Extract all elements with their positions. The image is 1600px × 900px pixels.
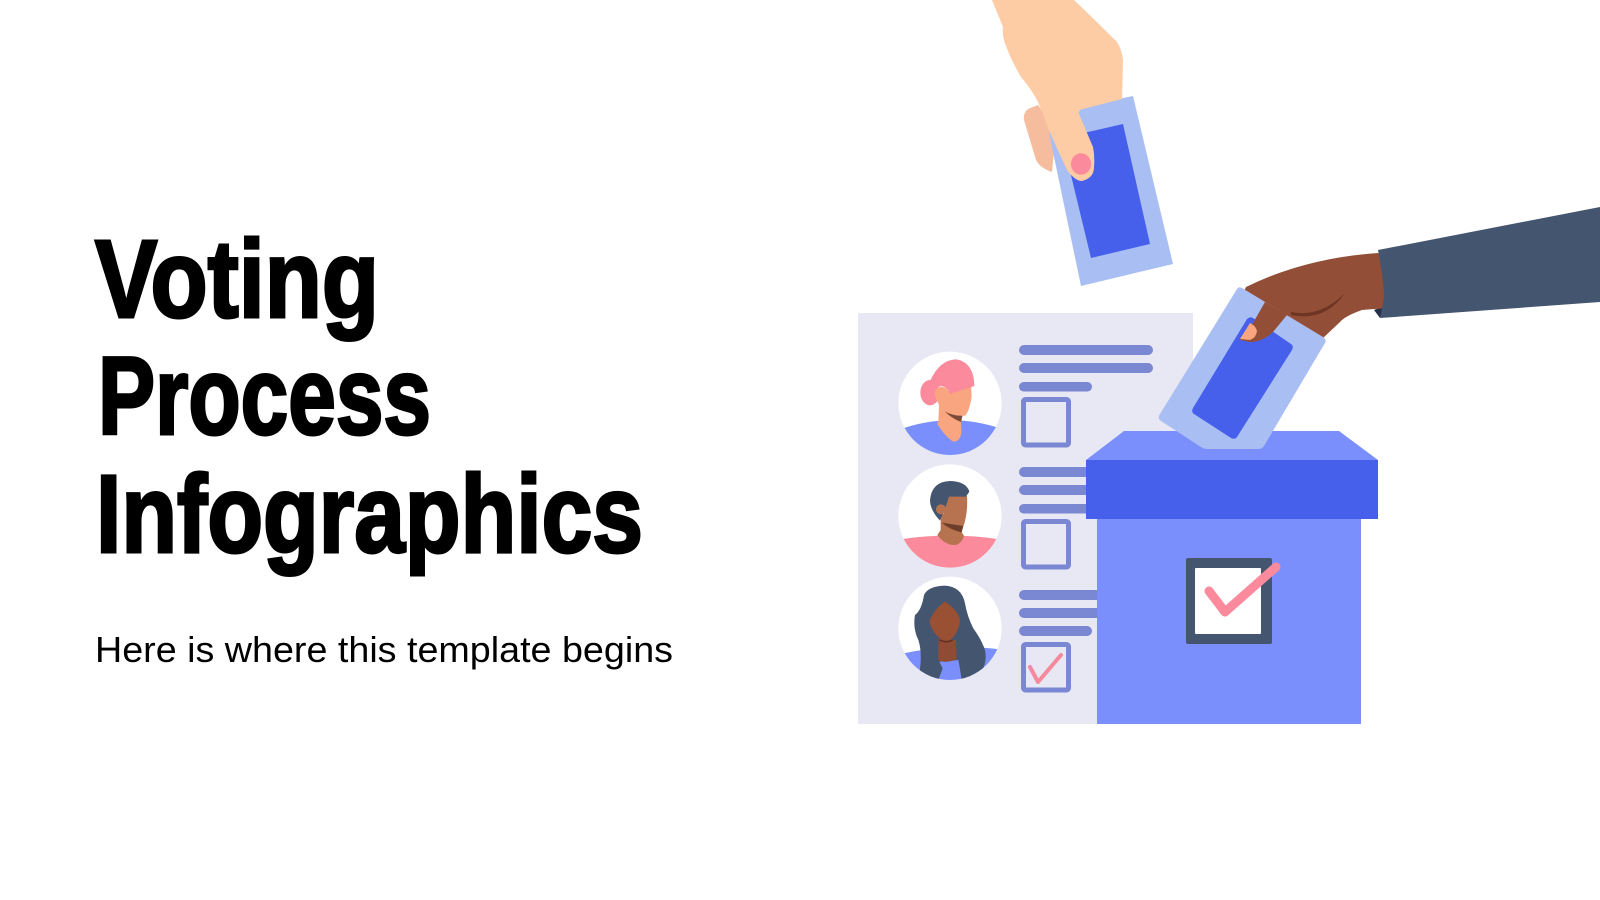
index finger [1240, 302, 1287, 342]
subtitle: Here is where this template begins [95, 629, 673, 670]
illustration: ballot box [1086, 431, 1378, 724]
row 2 text lines [1019, 467, 1153, 514]
hand [1240, 253, 1392, 338]
portrait: man with dark hair [898, 464, 1002, 570]
illustration: light-skinned hand holding ballot [992, 0, 1173, 286]
illustration: dark-skinned arm inserting ballot [1159, 207, 1600, 449]
jacket sleeve [1378, 207, 1600, 318]
illustration: ballot paper with candidates [858, 313, 1193, 724]
row 1 text lines [1019, 345, 1153, 392]
thumb nail [1240, 323, 1257, 340]
sleeve cuff [1374, 306, 1384, 318]
lid top [1086, 431, 1378, 460]
candidate rows [1019, 345, 1153, 690]
row 3 checked checkbox [1024, 644, 1068, 690]
portrait: woman with pink hair [898, 352, 1002, 460]
back finger [1024, 105, 1056, 172]
ballot card inner [1192, 317, 1293, 439]
row 2 empty checkbox [1024, 522, 1068, 567]
hand [992, 0, 1123, 181]
box body [1097, 519, 1361, 724]
row 3 text lines [1019, 590, 1153, 636]
candidate portraits [898, 352, 1002, 683]
ballot card [1159, 287, 1326, 449]
ballot card inner [1062, 124, 1150, 258]
title: Infographics [96, 453, 643, 576]
ballot card [1049, 96, 1173, 286]
knuckle shadow [1291, 293, 1345, 316]
fingernail [1071, 153, 1091, 175]
title: Process [98, 335, 431, 458]
title: Voting [95, 218, 379, 341]
box check emblem [1186, 558, 1276, 644]
lid front [1086, 460, 1378, 519]
title [95, 218, 643, 576]
portrait: woman with long hair [898, 577, 1002, 683]
paper sheet [858, 313, 1193, 724]
row 1 empty checkbox [1024, 400, 1068, 445]
